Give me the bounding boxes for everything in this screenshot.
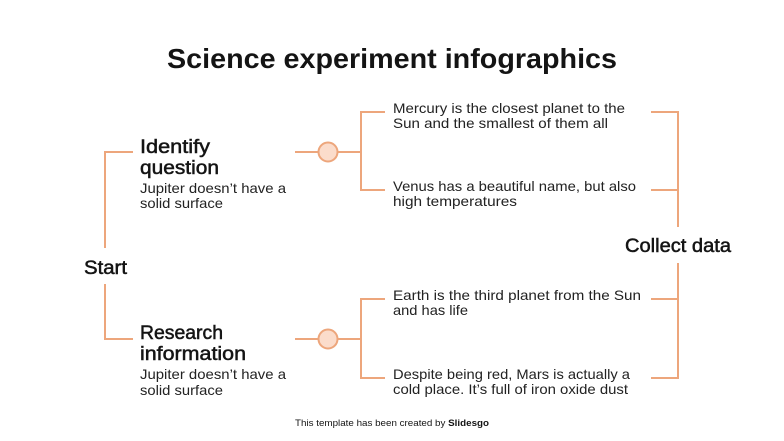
block: identify question: Jupiter doesn’t have a — [140, 180, 286, 196]
block: identify question — [140, 137, 286, 211]
text: mars: Despite being red, Mars is actually a — [393, 366, 630, 382]
lower connector with circle — [295, 299, 385, 378]
text: earth: and has life — [393, 302, 468, 318]
footer credit: This template has been created by Slidesgo — [295, 418, 489, 429]
text: mercury: Sun and the smallest of them all — [393, 115, 608, 131]
block: identify question: question — [140, 158, 219, 179]
text: venus — [393, 178, 636, 209]
start bracket bottom — [105, 284, 133, 339]
text: mars — [393, 366, 630, 397]
start node: Start — [84, 258, 128, 279]
block: identify question: Identify — [140, 137, 211, 158]
start bracket top — [105, 152, 133, 248]
text: venus: high temperatures — [393, 193, 517, 209]
block: identify question: solid surface — [140, 195, 223, 211]
upper connector with circle — [295, 112, 385, 190]
text: mars: cold place. It’s full of iron oxide dust — [393, 381, 628, 397]
block: research information: Research — [140, 323, 223, 344]
text: mercury: Mercury is the closest planet to the — [393, 100, 625, 116]
block: research information: information — [140, 344, 246, 365]
right bracket top — [651, 112, 678, 227]
block: research information — [140, 323, 286, 398]
text: venus: Venus has a beautiful name, but also — [393, 178, 636, 194]
text: mercury — [393, 100, 625, 131]
collect data node: Collect data — [625, 236, 731, 257]
text: earth — [393, 287, 641, 318]
block: research information: solid surface — [140, 382, 223, 398]
text: earth: Earth is the third planet from the Sun — [393, 287, 641, 303]
right bracket bottom — [651, 263, 678, 378]
block: research information: Jupiter doesn’t have a — [140, 366, 286, 382]
title: Science experiment infographics — [167, 43, 617, 74]
